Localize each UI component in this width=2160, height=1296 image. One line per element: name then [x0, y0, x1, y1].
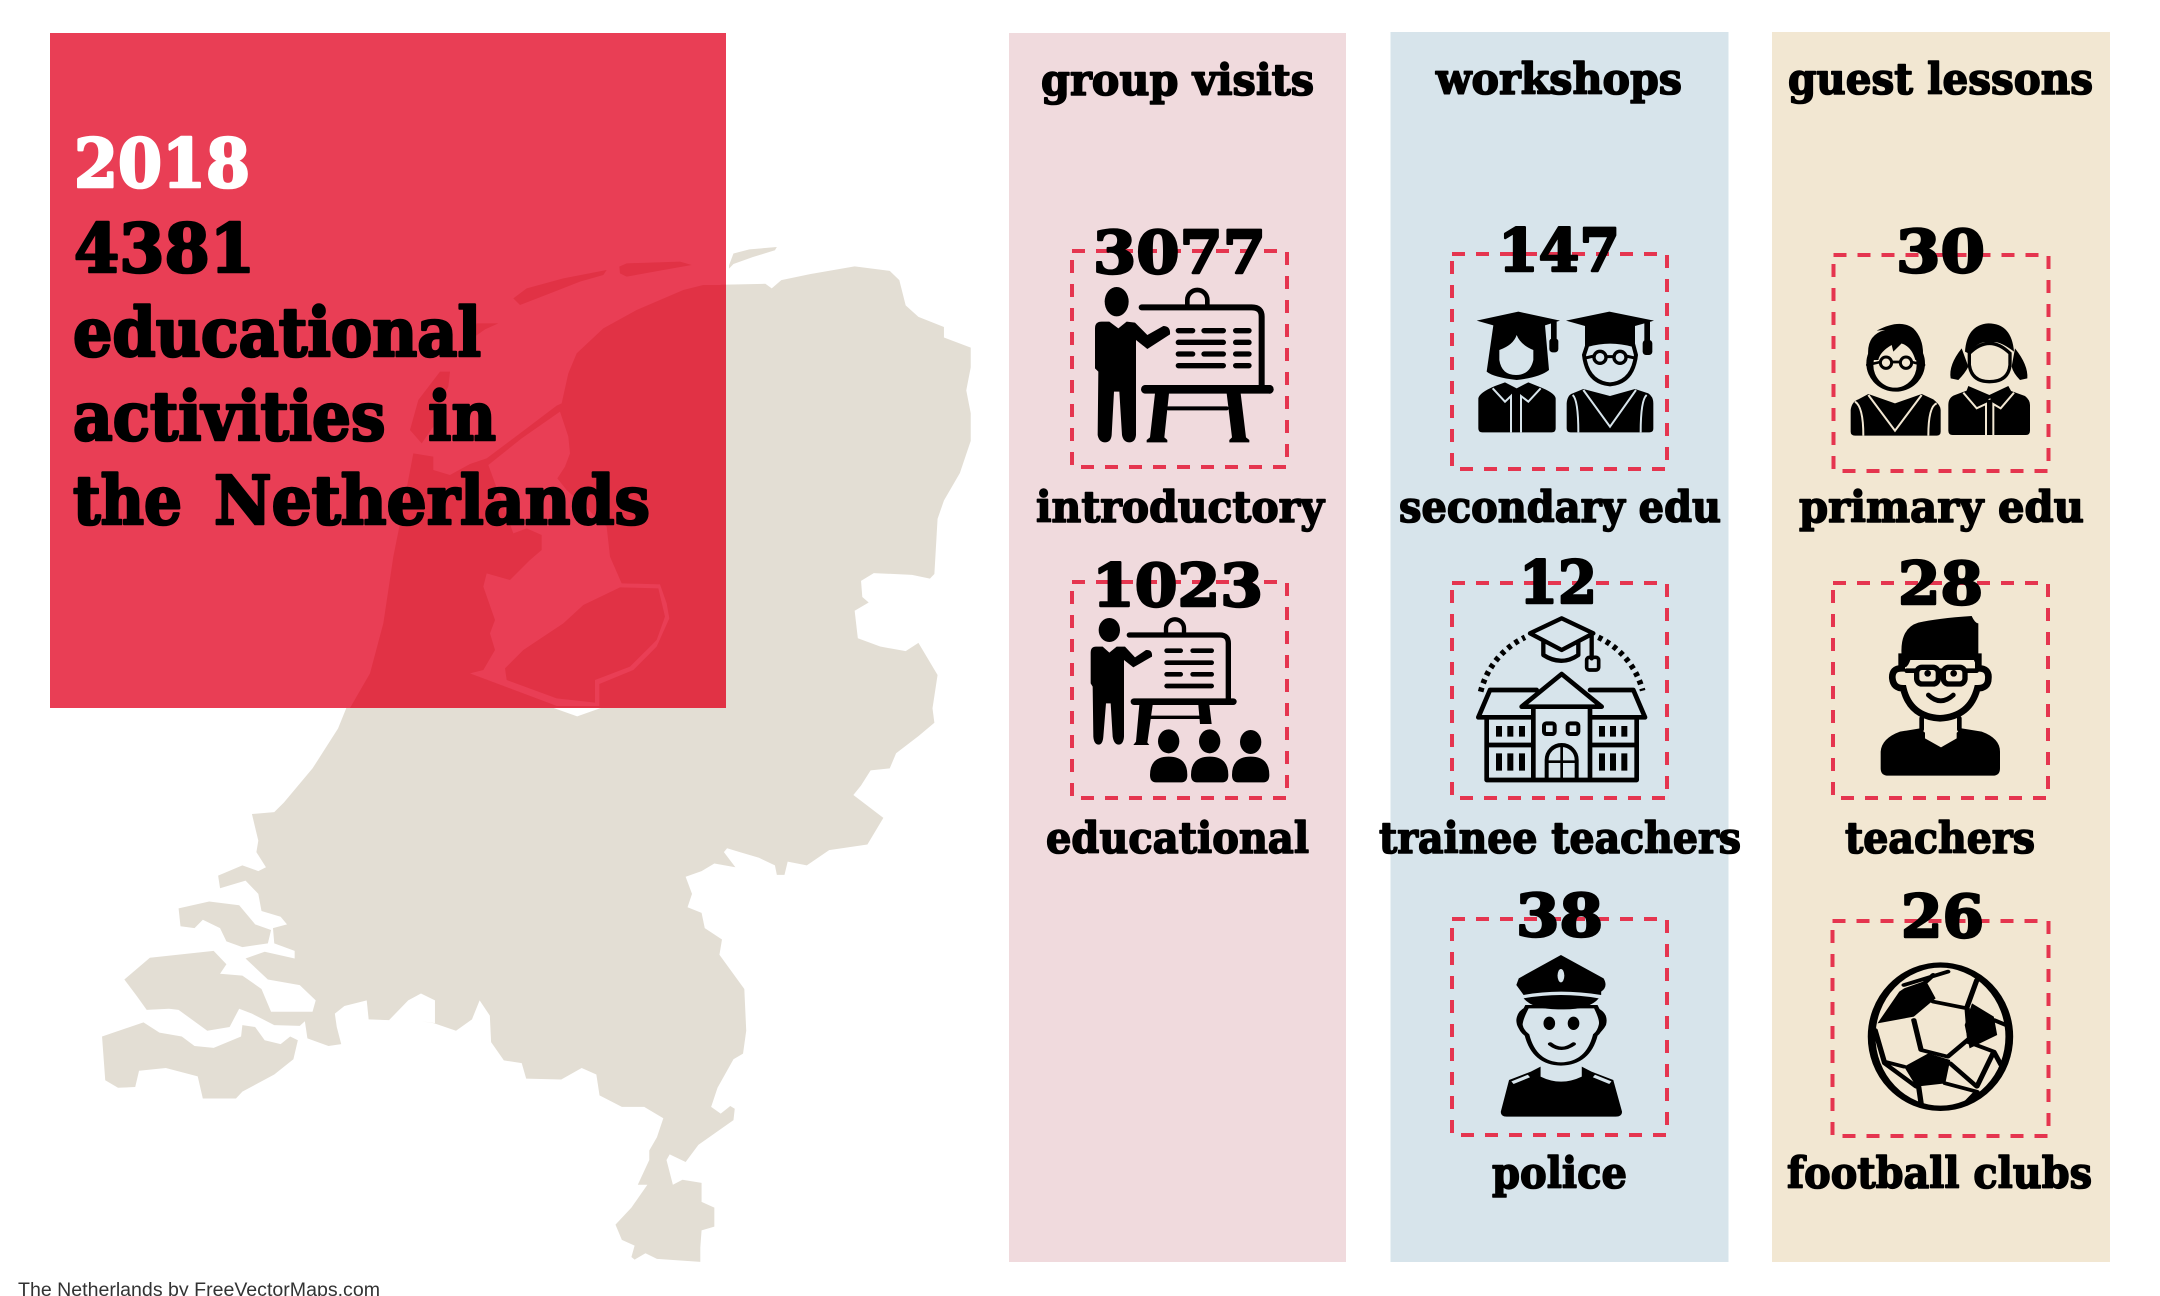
icon: school children	[1851, 323, 2030, 436]
title text	[73, 124, 650, 540]
title text: activities in	[73, 377, 496, 456]
number: 38: 38	[1516, 881, 1603, 950]
label: educational: educational	[1046, 814, 1309, 864]
panel: workshops	[1379, 32, 1741, 1262]
dashed frame: introductory	[1072, 251, 1287, 467]
title text: educational	[73, 293, 481, 372]
icon: teacher with audience	[1091, 618, 1269, 782]
title panel	[50, 33, 726, 708]
dashed frame: police	[1452, 919, 1667, 1135]
number: 147: 147	[1498, 216, 1620, 285]
number: 12: 12	[1519, 548, 1597, 617]
number: 1023: 1023	[1092, 551, 1263, 620]
dashed frame: trainee teachers	[1452, 583, 1667, 798]
label: police: police	[1492, 1149, 1627, 1199]
label: teachers: teachers	[1845, 814, 2035, 864]
icon: police officer	[1501, 955, 1622, 1117]
label: football clubs: football clubs	[1787, 1149, 2092, 1199]
number: 28: 28	[1898, 549, 1983, 618]
heading: workshops: workshops	[1435, 55, 1682, 105]
title text: 4381	[74, 209, 255, 288]
dashed frame: football clubs	[1832, 921, 2048, 1136]
label: introductory: introductory	[1036, 483, 1326, 533]
icon: football	[1872, 965, 2009, 1108]
title text: 2018	[74, 124, 250, 203]
icon: teacher at board	[1095, 287, 1274, 442]
icon: graduates	[1477, 312, 1654, 432]
title text: the	[73, 461, 182, 540]
dashed frame: teachers	[1833, 583, 2048, 798]
dashed frame: secondary edu	[1452, 254, 1667, 469]
dashed frame: educational	[1072, 582, 1287, 798]
label: primary edu: primary edu	[1799, 483, 2084, 533]
number: 30: 30	[1896, 217, 1985, 286]
icon: teacher with glasses	[1881, 616, 2000, 776]
heading: group visits: group visits	[1041, 56, 1314, 106]
icon: school building with cap	[1478, 618, 1645, 780]
number: 26: 26	[1901, 882, 1984, 951]
dashed frame: primary edu	[1834, 255, 2048, 471]
heading: guest lessons: guest lessons	[1788, 55, 2093, 105]
title text: Netherlands	[214, 461, 650, 540]
label: secondary edu: secondary edu	[1399, 483, 1721, 533]
label: trainee teachers: trainee teachers	[1379, 814, 1741, 864]
panel: guest lessons	[1772, 32, 2110, 1262]
map of the Netherlands	[102, 247, 971, 1262]
panel: group visits	[1009, 33, 1346, 1262]
number: 3077: 3077	[1093, 218, 1266, 287]
